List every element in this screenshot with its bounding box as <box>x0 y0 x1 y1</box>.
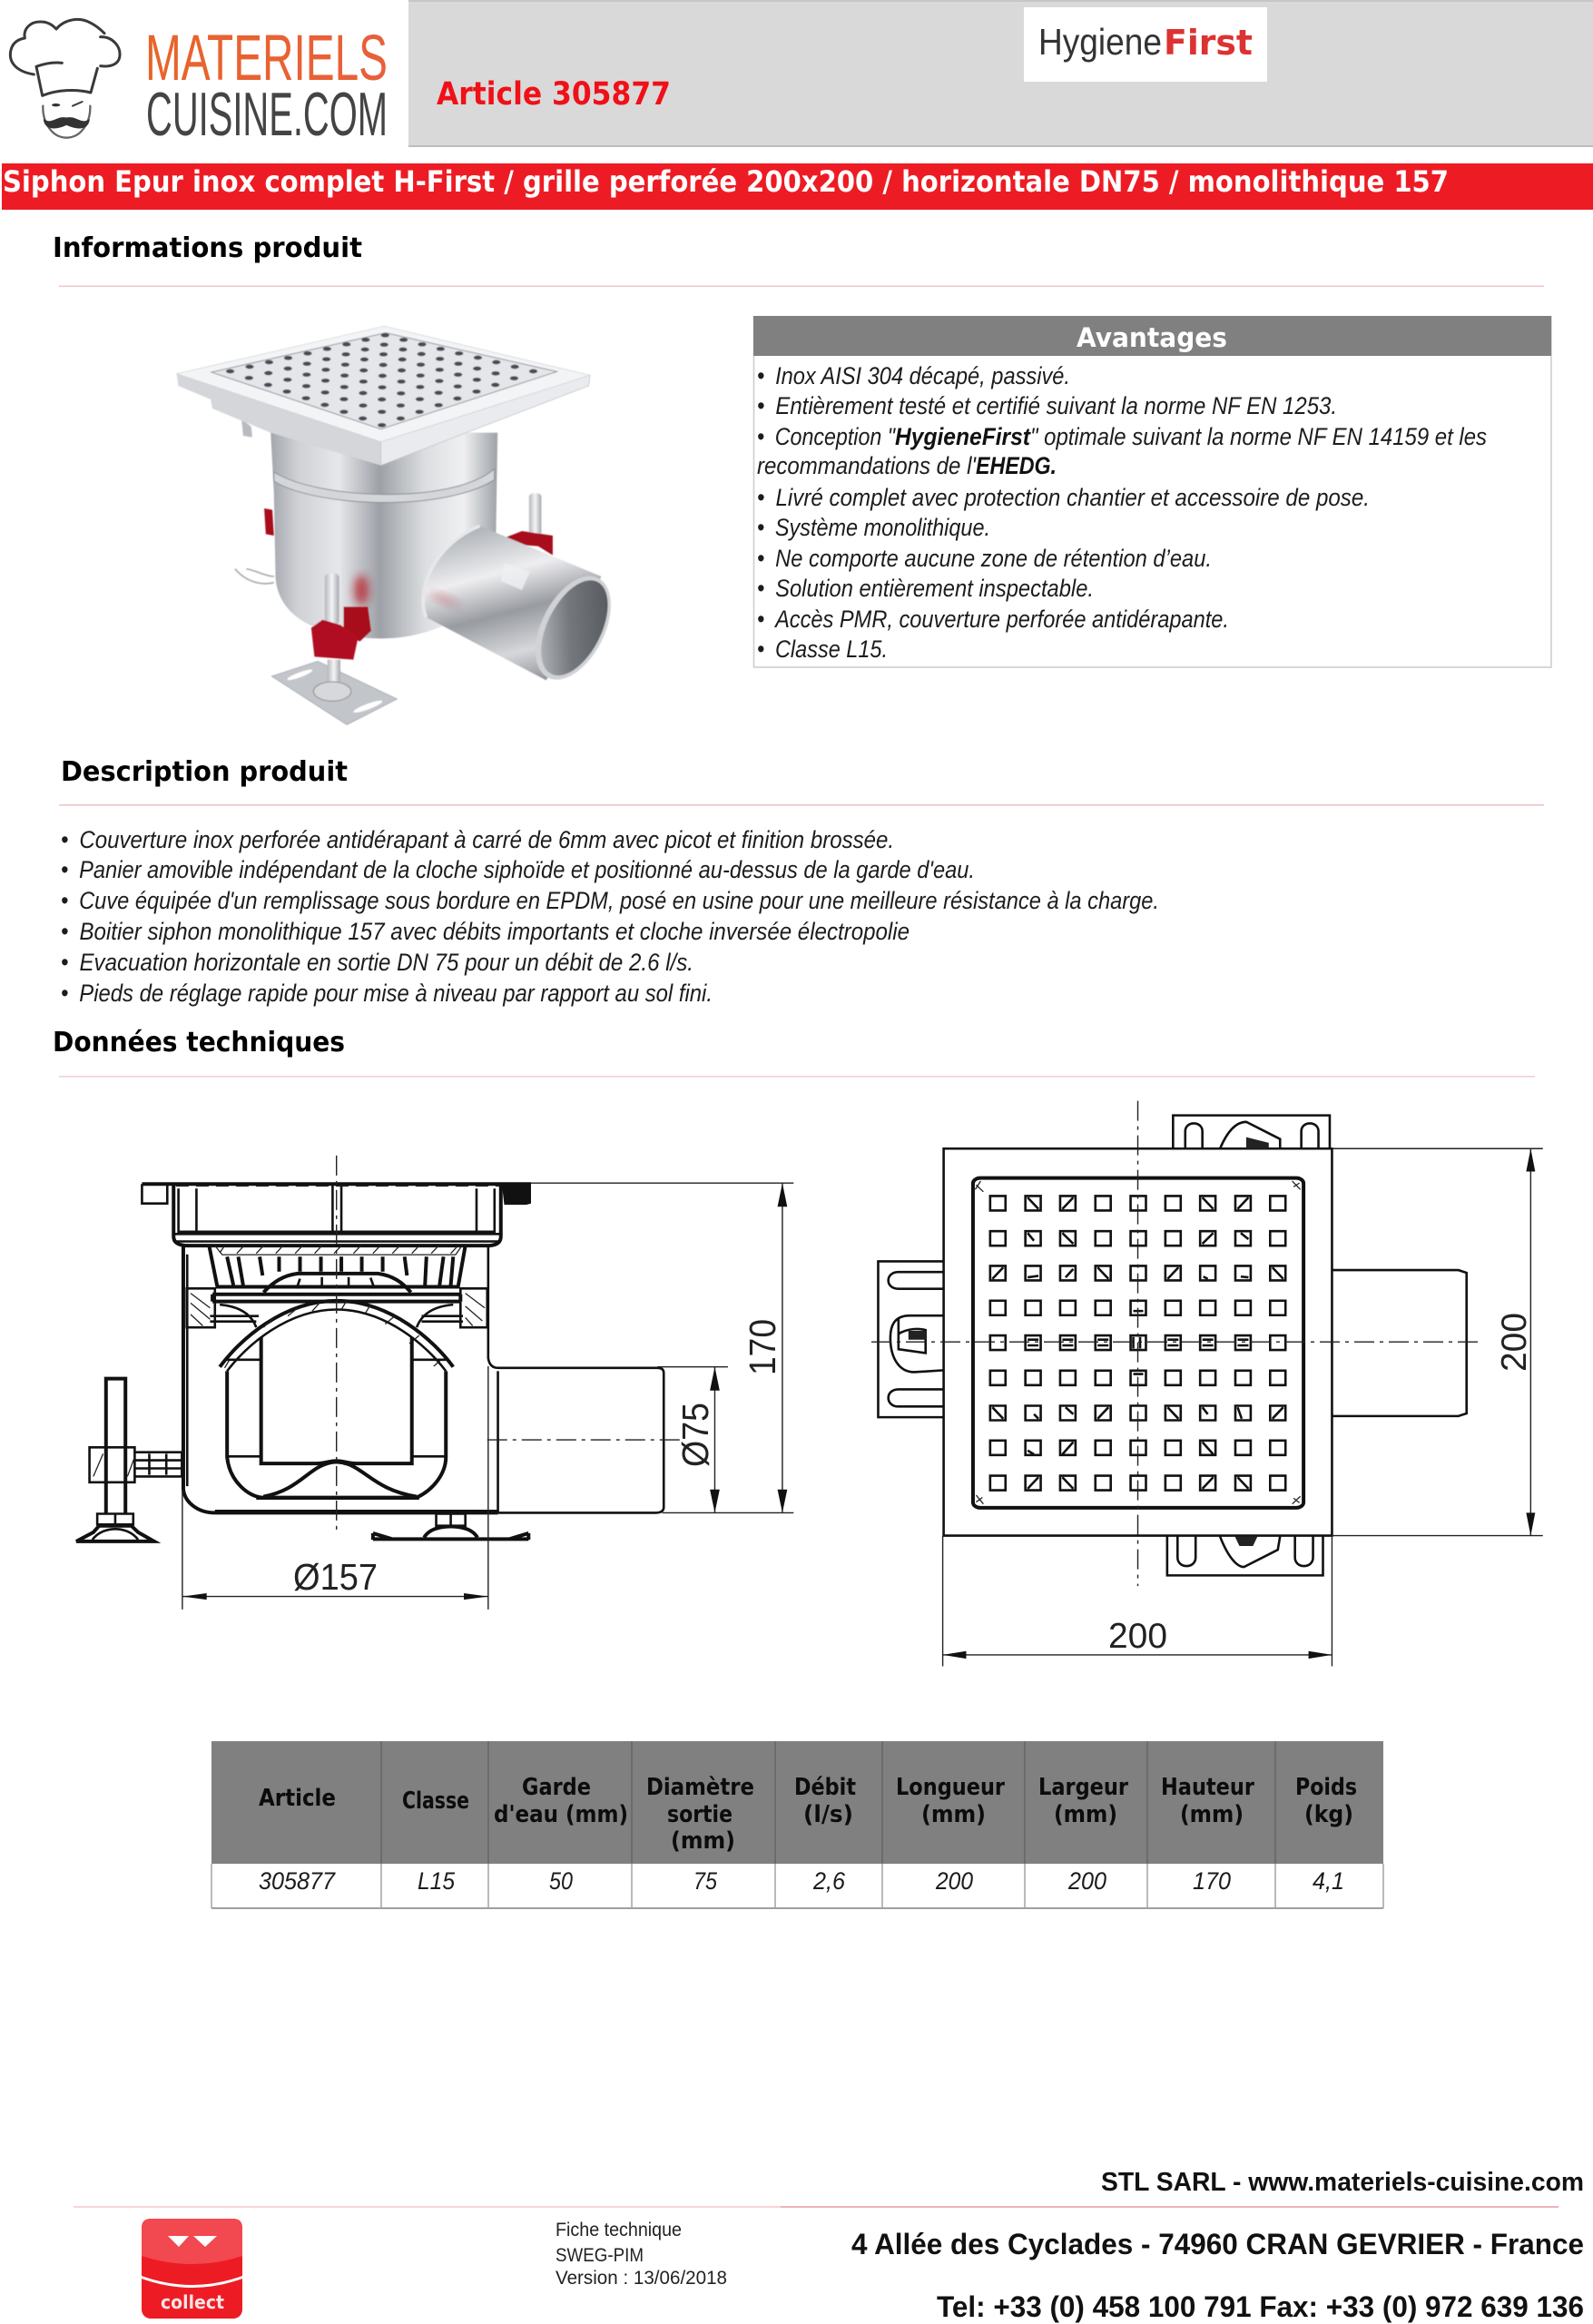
table data row: 200 <box>1067 1867 1106 1895</box>
description list: • Boitier siphon monolithique 157 avec débits importants et cloche inversée électropolie <box>61 918 910 945</box>
table data row <box>259 1867 1344 1895</box>
advantages list: • Solution entièrement inspectable. <box>757 575 1094 602</box>
heading: Données techniques: Données techniques <box>53 1027 345 1059</box>
advantages list <box>757 362 1487 663</box>
advantages list: EHEDG. <box>976 452 1057 479</box>
footer phone and fax: Tel: +33 (0) 458 100 791 Fax: +33 (0) 972 639 136 <box>937 2290 1584 2323</box>
document version note: Version : 13/06/2018 <box>556 2268 727 2289</box>
top view linework <box>871 1101 1543 1667</box>
logo word: Hygiene: Hygiene <box>1038 21 1162 63</box>
label: diameter 157: Ø157 <box>293 1556 378 1598</box>
table header labels: Débit <box>794 1774 856 1801</box>
dimension lines <box>182 1156 793 1610</box>
hatching inside perforations <box>992 1197 1283 1489</box>
table header labels: Longueur <box>896 1774 1005 1801</box>
logo word: MATERIELS: MATERIELS <box>145 23 388 94</box>
right adjusting foot <box>373 1513 528 1540</box>
table header labels: (mm) <box>921 1801 986 1828</box>
heading: Informations produit: Informations produit <box>53 232 362 264</box>
advantages list: • Inox AISI 304 décapé, passivé. <box>757 362 1070 389</box>
rear adjusting foot <box>503 493 553 556</box>
advantages list: • Accès PMR, couverture perforée antidérapante. <box>757 606 1229 633</box>
advantages list: • Entièrement testé et certifié suivant la norme NF EN 1253. <box>757 392 1337 419</box>
advantages list: HygieneFirst <box>895 423 1031 450</box>
table header labels: sortie <box>667 1801 733 1828</box>
advantages list: • Conception " <box>757 423 896 450</box>
document version note: Fiche technique <box>556 2220 682 2240</box>
table data row: 2,6 <box>812 1867 846 1895</box>
table data row: L15 <box>418 1867 456 1895</box>
advantages list: • Ne comporte aucune zone de rétention d’eau. <box>757 545 1212 572</box>
description list: • Panier amovible indépendant de la cloche siphoïde et positionné au-dessus de la garde d'eau. <box>61 856 975 883</box>
table header labels: Classe <box>402 1787 469 1815</box>
table header labels: (l/s) <box>803 1801 853 1828</box>
outlet pipe <box>423 526 626 690</box>
advantages list: • Livré complet avec protection chantier et accessoire de pose. <box>757 484 1370 511</box>
advantages list: • Système monolithique. <box>757 514 990 541</box>
advantages list: • Classe L15. <box>757 635 888 663</box>
table header labels: Poids <box>1295 1774 1357 1801</box>
article number: Article 305877 <box>437 76 671 113</box>
left mounting bracket <box>878 1261 944 1417</box>
seal blocks <box>187 1288 487 1327</box>
table data row: 200 <box>935 1867 973 1895</box>
panel: Avantages <box>753 316 1551 667</box>
body walls <box>183 1246 498 1512</box>
red reflection <box>354 575 369 606</box>
strainer basket <box>209 1246 466 1302</box>
grille top <box>177 326 590 442</box>
document version note <box>556 2220 727 2289</box>
description list: • Pieds de réglage rapide pour mise à niveau par rapport au sol fini. <box>61 980 713 1007</box>
section view linework <box>76 1156 793 1610</box>
Avantages heading: Avantages <box>1077 322 1227 353</box>
top mounting bracket <box>1173 1116 1330 1148</box>
table data row: 75 <box>693 1867 718 1895</box>
table header labels: Article <box>259 1785 336 1812</box>
advantages list: recommandations de l' <box>757 452 977 479</box>
perforation dots <box>226 333 537 428</box>
technical drawing: top view <box>871 1101 1543 1667</box>
bell and trap <box>220 1301 453 1499</box>
table: specifications <box>211 1741 1383 1909</box>
technical drawing: side section <box>76 1156 793 1610</box>
product photo <box>177 326 626 724</box>
logo word: CUISINE.COM: CUISINE.COM <box>146 80 388 149</box>
table header labels: (kg) <box>1304 1801 1353 1828</box>
table data row: 170 <box>1193 1867 1231 1895</box>
table data row: 4,1 <box>1313 1867 1344 1895</box>
table header labels: Hauteur <box>1161 1774 1254 1801</box>
table data row: 50 <box>549 1867 573 1895</box>
table data row: 305877 <box>259 1867 336 1895</box>
table header labels: (mm) <box>671 1827 735 1855</box>
table header labels: (mm) <box>1054 1801 1117 1828</box>
label: width 200: 200 <box>1108 1617 1167 1656</box>
left clip and wire <box>235 419 274 584</box>
groove band <box>274 469 495 503</box>
description list: • Cuve équipée d'un remplissage sous bordure en EPDM, posé en usine pour une meilleure résistance à la charge. <box>61 887 1159 914</box>
heading: Description produit: Description produit <box>61 756 348 788</box>
header band <box>408 0 1593 147</box>
table header labels: Largeur <box>1038 1774 1128 1801</box>
product title: Siphon Epur inox complet H-First / grille perforée 200x200 / horizontale DN75 / monolithique 157 <box>3 164 1449 199</box>
left adjusting foot <box>76 1379 182 1541</box>
label: height 200: 200 <box>1495 1313 1534 1372</box>
table header labels: (mm) <box>1180 1801 1244 1828</box>
title bar <box>2 163 1593 210</box>
cover outline <box>944 1148 1332 1536</box>
perforated grid frame <box>973 1178 1303 1508</box>
label: diameter 75: Ø75 <box>674 1403 716 1467</box>
dimension lines <box>871 1101 1543 1667</box>
table header labels: Garde <box>522 1774 591 1801</box>
advantages list: " optimale suivant la norme NF EN 14159 et les <box>1030 423 1487 450</box>
logo word: First: First <box>1164 23 1253 63</box>
grid perforations <box>990 1196 1285 1491</box>
footer address: 4 Allée des Cyclades - 74960 CRAN GEVRIER - France <box>851 2228 1584 2260</box>
badge word: collect <box>161 2291 224 2313</box>
grate frame <box>142 1184 531 1246</box>
perforated plate <box>211 333 557 429</box>
document version note: SWEG-PIM <box>556 2245 644 2266</box>
bottom mounting bracket <box>1167 1536 1323 1575</box>
table header labels: Diamètre <box>646 1774 754 1801</box>
label: height 170: 170 <box>742 1319 783 1375</box>
table header labels: d'eau (mm) <box>494 1801 628 1828</box>
description list: • Evacuation horizontale en sortie DN 75 pour un débit de 2.6 l/s. <box>61 949 693 976</box>
grille plate side faces <box>177 374 590 466</box>
front adjusting foot <box>271 574 397 724</box>
footer company name: STL SARL - www.materiels-cuisine.com <box>1101 2168 1584 2197</box>
logo: HygieneFirst <box>1024 7 1267 82</box>
description list: • Couverture inox perforée antidérapant à carré de 6mm avec picot et finition brossée. <box>61 826 894 853</box>
corner screws <box>975 1181 1301 1504</box>
logo: Materiels Cuisine <box>10 19 388 149</box>
icon: collect badge <box>142 2219 242 2319</box>
outlet pipe outline <box>1332 1270 1467 1416</box>
icon: chef hat and face <box>10 19 120 138</box>
stainless body <box>270 433 497 638</box>
description list <box>61 826 1159 1007</box>
table header labels <box>259 1774 1357 1855</box>
